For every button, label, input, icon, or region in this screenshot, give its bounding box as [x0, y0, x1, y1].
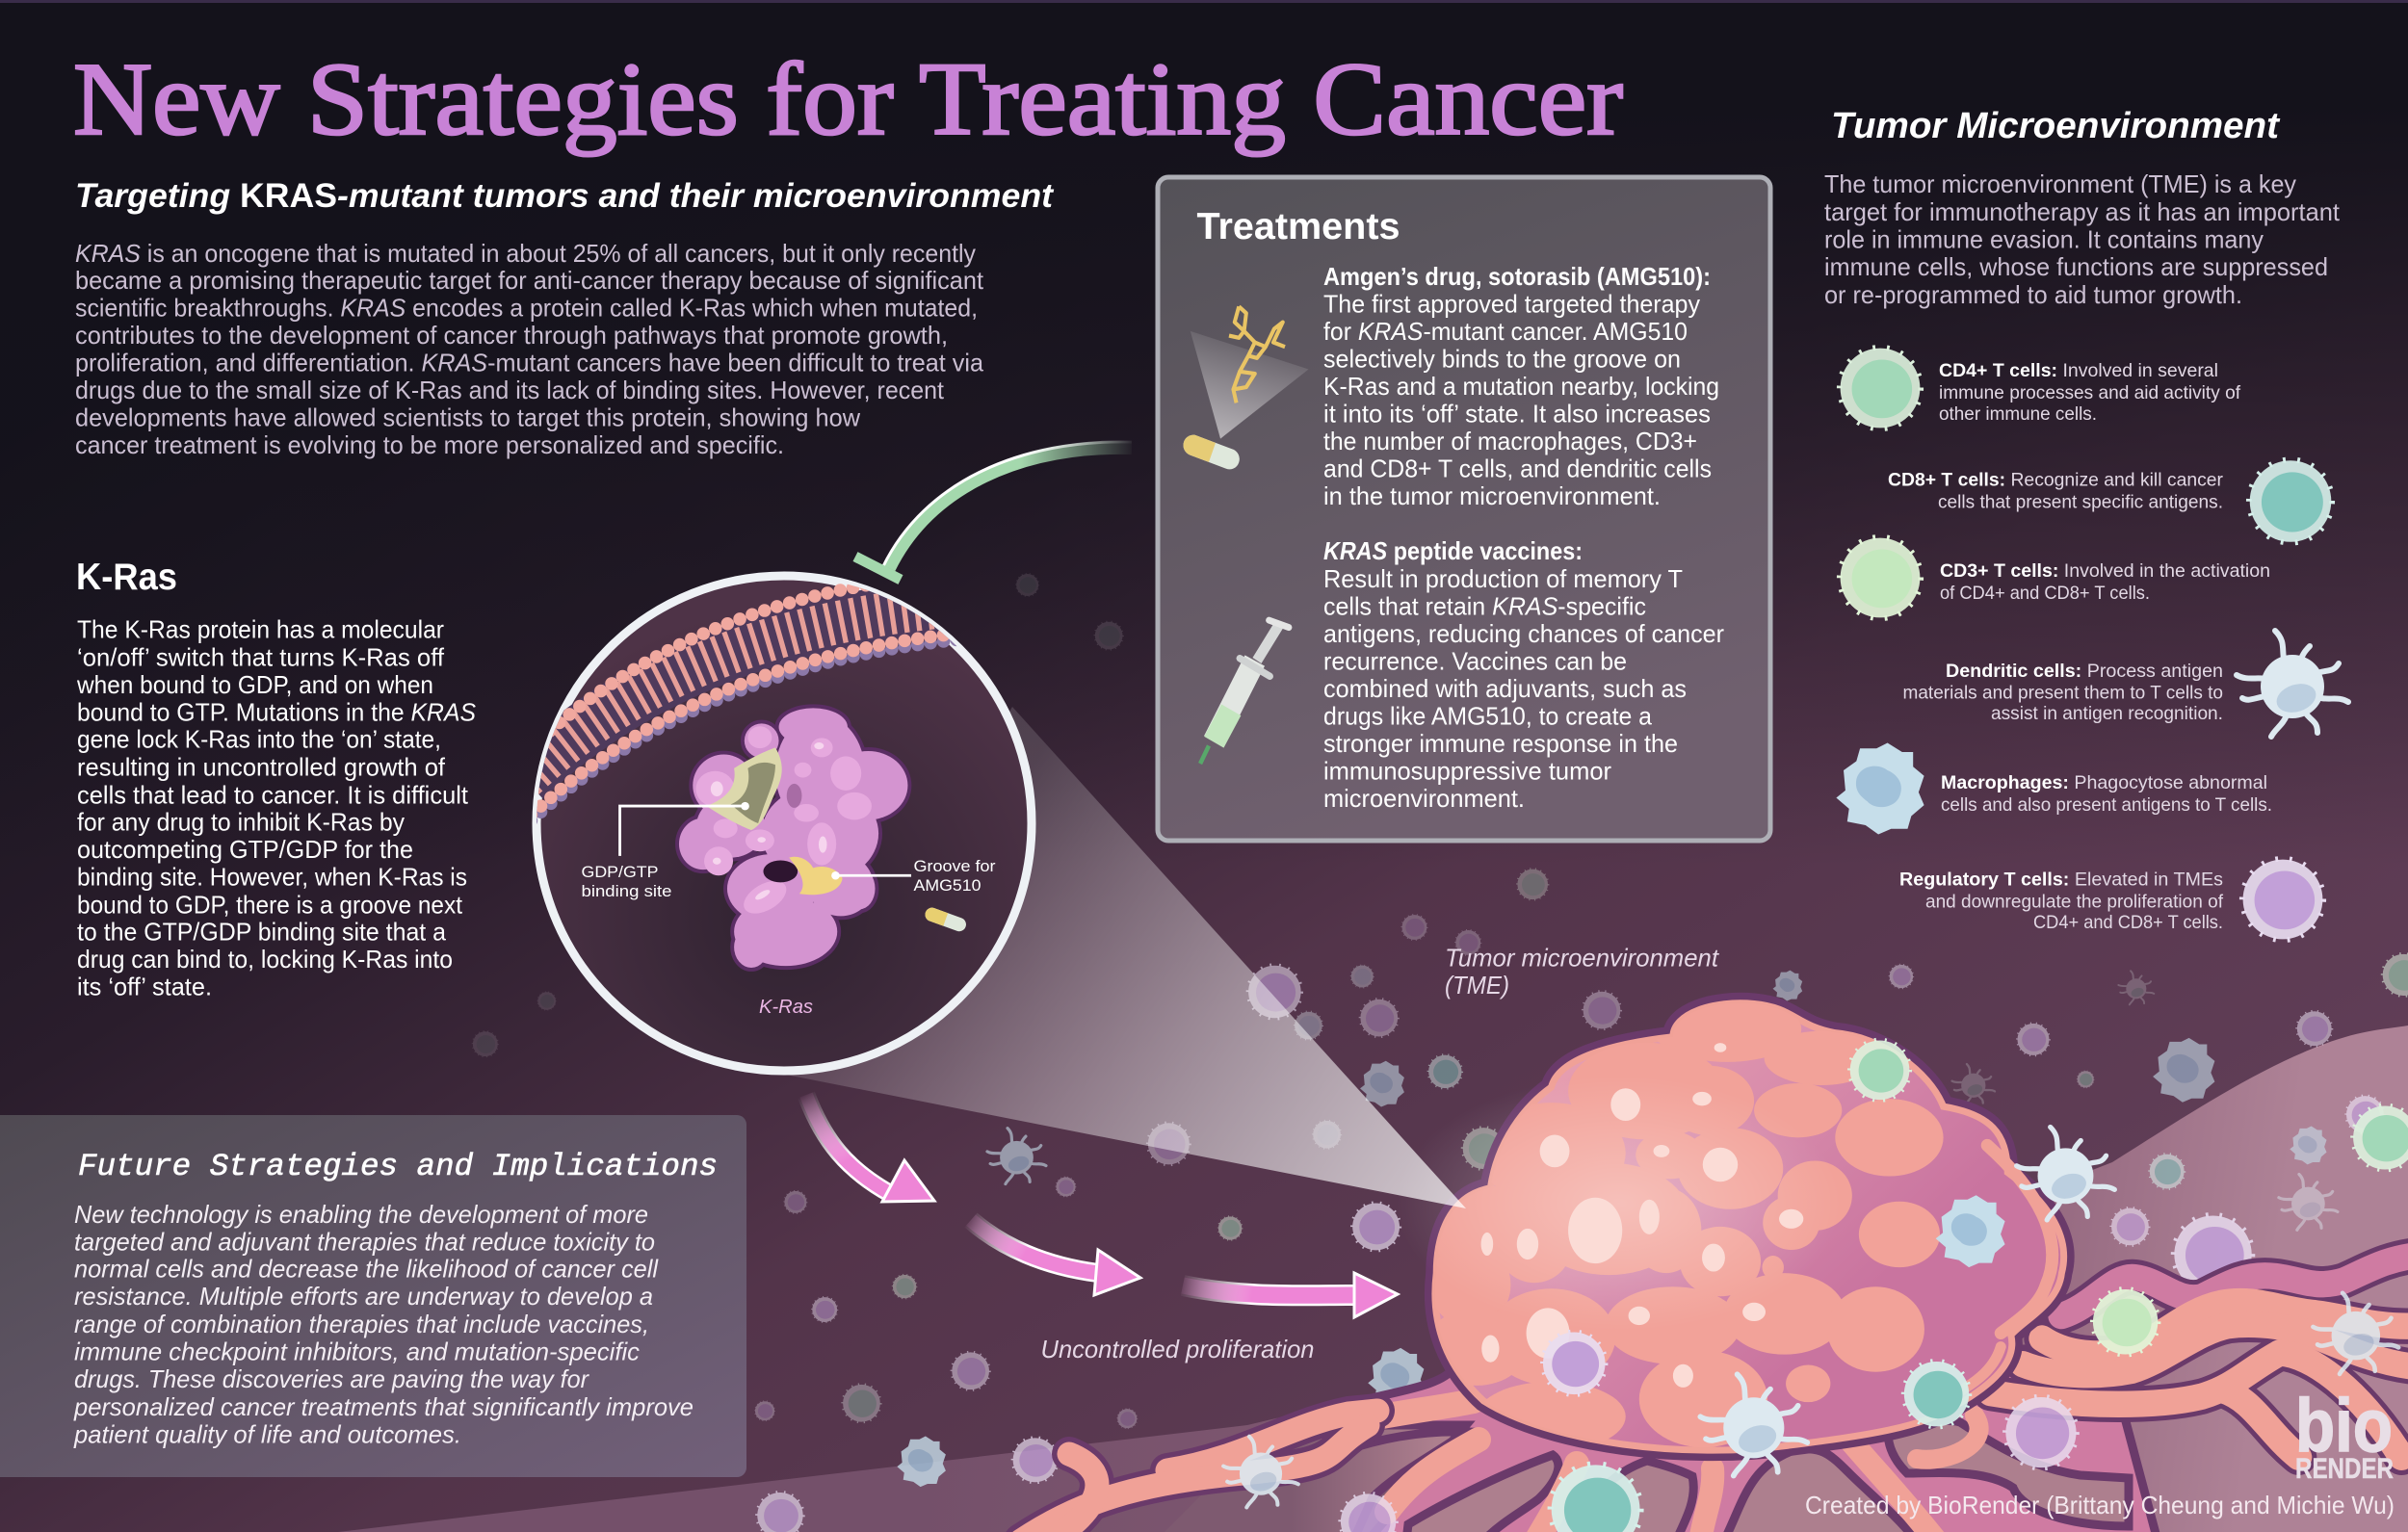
intro paragraph: became a promising therapeutic target for anti-cancer therapy because of significant: [75, 266, 984, 295]
K-Ras text block: The K-Ras protein has a molecular: [77, 615, 444, 644]
intro paragraph: developments have allowed scientists to target this protein, showing how: [75, 402, 860, 431]
legend: CD8+ T cells: CD8+ T cells: Recognize and kill cancer: [1888, 470, 2223, 491]
tumor rim crescents: [1940, 1145, 2053, 1402]
intro paragraph: KRAS is an oncogene that is mutated in about 25% of all cancers, but it only recently: [75, 239, 976, 268]
future strategies text: [73, 1200, 694, 1448]
K-Ras text block: outcompeting GTP/GDP for the: [77, 835, 413, 864]
K-Ras circle labels: Groove for: [913, 858, 996, 875]
future strategies text: patient quality of life and outcomes.: [73, 1419, 461, 1448]
peptide vaccine text: drugs like AMG510, to create a: [1323, 702, 1653, 731]
TME paragraph: target for immunotherapy as it has an important: [1824, 197, 2341, 226]
intro paragraph: [75, 239, 984, 459]
legend: CD8+ T cells: cells that present specific antigens.: [1938, 491, 2223, 512]
tumor highlights: [1481, 1043, 1803, 1388]
subtitle: Targeting KRAS-mutant tumors and their microenvironment: [75, 177, 1054, 215]
legend: CD4+ T cells: other immune cells.: [1939, 403, 2097, 425]
tumor mass: [1396, 996, 2064, 1451]
legend: macrophages: Macrophages: Phagocytose abnormal: [1941, 772, 2267, 793]
arrow 2: [971, 1220, 1140, 1295]
legend: CD4+ T cells: [1840, 348, 2241, 428]
salmon root strips: [1329, 1401, 1979, 1532]
sotorasib text: selectively binds to the groove on: [1323, 345, 1681, 374]
sotorasib text: and CD8+ T cells, and dendritic cells: [1323, 454, 1712, 483]
panel: treatments: [1158, 177, 1770, 841]
future strategies text: New technology is enabling the development of more: [74, 1200, 648, 1229]
peptide vaccine text: Result in production of memory T: [1323, 564, 1683, 593]
K-Ras zoom circle: [521, 576, 1032, 1071]
sotorasib text: it into its ‘off’ state. It also increases: [1323, 400, 1711, 428]
peptide vaccine text: KRAS peptide vaccines:: [1323, 536, 1583, 565]
K-Ras circle labels: AMG510: [913, 877, 981, 895]
legend: dendritic cells: assist in antigen recognition.: [1991, 703, 2223, 724]
K-Ras text block: to the GTP/GDP binding site that a: [77, 918, 447, 947]
tumor lobe glow: [1396, 1041, 1842, 1366]
tissue ground band: [338, 1026, 2408, 1532]
TME paragraph: [1824, 169, 2341, 309]
legend: CD4+ T cells: CD4+ T cells: Involved in several: [1939, 360, 2218, 381]
label: tumor microenvironment: (TME): [1445, 971, 1509, 1000]
TME paragraph: The tumor microenvironment (TME) is a key: [1824, 169, 2296, 198]
tumor tentacles bottom-left: [1021, 1411, 1377, 1532]
legend: CD3+ T cells: of CD4+ and CD8+ T cells.: [1940, 583, 2150, 604]
legend: regulatory T cells: and downregulate the proliferation of: [1925, 892, 2224, 913]
TME paragraph: or re-programmed to aid tumor growth.: [1824, 280, 2242, 309]
AMG510 groove: [763, 861, 798, 882]
icon: pill and molecule: [1181, 306, 1309, 472]
K-Ras protein: [679, 708, 907, 968]
K-Ras text block: gene lock K-Ras into the ‘on’ state,: [77, 725, 441, 754]
K-Ras text block: [76, 615, 477, 1000]
future strategies heading: Future Strategies and Implications: [78, 1149, 718, 1184]
K-Ras circle labels: K-Ras: [759, 997, 813, 1018]
TME paragraph: immune cells, whose functions are suppressed: [1824, 252, 2328, 281]
icon: syringe: [1200, 620, 1289, 764]
ground patch left of tumor roots: [1156, 1415, 1466, 1532]
K-Ras heading: K-Ras: [76, 557, 177, 598]
legend: dendritic cells: [1903, 631, 2348, 737]
intro paragraph: scientific breakthroughs. KRAS encodes a protein called K-Ras which when mutated,: [75, 293, 978, 322]
legend: CD3+ T cells: CD3+ T cells: Involved in the activation: [1940, 560, 2270, 582]
K-Ras text block: cells that lead to cancer. It is difficult: [77, 780, 469, 809]
sotorasib text: in the tumor microenvironment.: [1323, 481, 1661, 510]
tumor tentacles right: [1991, 1255, 2408, 1457]
TME paragraph: role in immune evasion. It contains many: [1824, 225, 2264, 254]
sotorasib text: Amgen’s drug, sotorasib (AMG510):: [1323, 262, 1711, 291]
peptide vaccine text: microenvironment.: [1323, 784, 1525, 813]
K-Ras text block: for any drug to inhibit K-Ras by: [77, 808, 405, 837]
K-Ras text block: ‘on/off’ switch that turns K-Ras off: [77, 642, 445, 671]
peptide vaccine text: cells that retain KRAS-specific: [1323, 592, 1646, 621]
K-Ras text block: bound to GDP, there is a groove next: [77, 890, 463, 919]
legend: dendritic cells: materials and present them to T cells to: [1903, 682, 2223, 703]
K-Ras circle labels: [582, 858, 996, 1018]
legend: macrophages: [1836, 743, 2272, 834]
legend: regulatory T cells: [1899, 859, 2323, 940]
lipid bilayer membrane: [521, 576, 957, 820]
sotorasib text: The first approved targeted therapy: [1323, 289, 1700, 318]
panel: future strategies: [0, 1115, 746, 1477]
peptide vaccine text: antigens, reducing chances of cancer: [1323, 619, 1724, 648]
peptide vaccine text: combined with adjuvants, such as: [1323, 674, 1687, 703]
title: New Strategies for Treating Cancer: [73, 42, 1623, 157]
future strategies text: immune checkpoint inhibitors, and mutation-specific: [74, 1337, 640, 1366]
peptide vaccine text: stronger immune response in the: [1323, 729, 1678, 758]
GDP/GTP binding pocket: [707, 747, 782, 830]
intro paragraph: drugs due to the small size of K-Ras and its lack of binding sites. However, recent: [75, 376, 945, 404]
K-Ras text block: bound to GTP. Mutations in the KRAS: [77, 697, 477, 726]
treatments heading: Treatments: [1196, 206, 1400, 247]
binding site callout lines: [620, 802, 911, 880]
future strategies text: resistance. Multiple efforts are underway to develop a: [74, 1282, 653, 1311]
peptide vaccine text: [1323, 536, 1724, 813]
future strategies text: range of combination therapies that include vaccines,: [74, 1310, 649, 1338]
K-Ras text block: binding site. However, when K-Ras is: [77, 863, 467, 892]
background immune cells: [473, 574, 2408, 1532]
tumor body: [1435, 1003, 2064, 1450]
immune cells on tumor: [1223, 1040, 2398, 1532]
K-Ras text block: its ‘off’ state.: [77, 972, 212, 1000]
future strategies text: targeted and adjuvant therapies that reduce toxicity to: [74, 1227, 655, 1256]
arrow 1: [806, 1095, 934, 1202]
legend: CD3+ T cells: [1840, 537, 2270, 618]
K-Ras circle labels: GDP/GTP: [582, 864, 659, 881]
sotorasib text: the number of macrophages, CD3+: [1323, 427, 1697, 455]
K-Ras text block: drug can bind to, locking K-Ras into: [77, 945, 453, 974]
K-Ras circle labels: binding site: [582, 883, 672, 900]
label: uncontrolled proliferation: Uncontrolled proliferation: [1040, 1335, 1314, 1363]
legend: dendritic cells: Dendritic cells: Process antigen: [1946, 661, 2223, 682]
future strategies text: personalized cancer treatments that significantly improve: [73, 1392, 694, 1421]
proliferation arrows: [806, 1095, 1398, 1317]
arrow 3: [1183, 1273, 1398, 1317]
future strategies text: normal cells and decrease the likelihood of cancer cell: [74, 1255, 659, 1284]
label: tumor microenvironment: [1445, 944, 1720, 1000]
peptide vaccine text: recurrence. Vaccines can be: [1323, 647, 1627, 676]
tumor microenvironment heading: Tumor Microenvironment: [1831, 106, 2280, 146]
tumor lobes: [1426, 996, 1944, 1451]
legend: regulatory T cells: CD4+ and CD8+ T cells.: [2033, 912, 2223, 933]
logo: BioRender: bio: [2295, 1383, 2393, 1467]
K-Ras text block: when bound to GDP, and on when: [76, 670, 433, 699]
small pill: [925, 907, 966, 932]
legend: regulatory T cells: Regulatory T cells: Elevated in TMEs: [1899, 869, 2223, 890]
tumor root skirt: [1291, 1348, 2158, 1532]
sotorasib text: for KRAS-mutant cancer. AMG510: [1323, 317, 1688, 346]
label: tumor microenvironment: Tumor microenvironment: [1445, 944, 1720, 973]
intro paragraph: cancer treatment is evolving to be more personalized and specific.: [75, 430, 784, 459]
sotorasib text: K-Ras and a mutation nearby, locking: [1323, 372, 1719, 401]
sotorasib text: [1323, 262, 1719, 510]
legend: CD8+ T cells: [1888, 459, 2332, 543]
legend: CD4+ T cells: immune processes and aid activity of: [1939, 382, 2241, 403]
zoom cone to tumor: [786, 707, 1466, 1208]
intro paragraph: proliferation, and differentiation. KRAS-mutant cancers have been difficult to treat via: [75, 349, 984, 377]
K-Ras text block: resulting in uncontrolled growth of: [77, 753, 446, 782]
future strategies text: drugs. These discoveries are paving the way for: [74, 1364, 589, 1393]
legend: macrophages: cells and also present antigens to T cells.: [1941, 794, 2272, 816]
inhibition arrow: [855, 442, 1132, 580]
intro paragraph: contributes to the development of cancer through pathways that promote growth,: [75, 321, 948, 350]
ground patches between roots: [1291, 1420, 2129, 1532]
peptide vaccine text: immunosuppressive tumor: [1323, 757, 1611, 786]
